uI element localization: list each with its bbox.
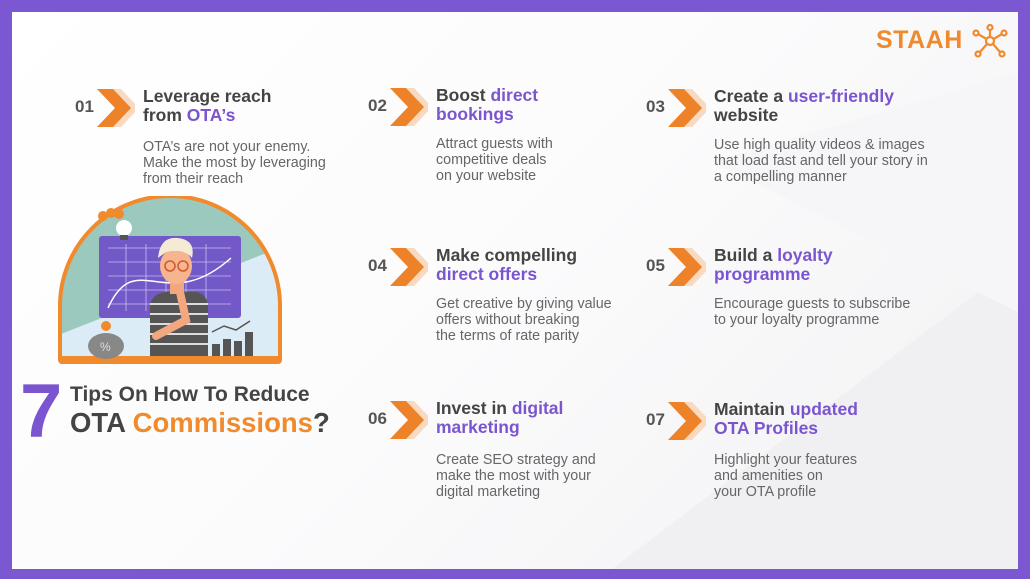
tip 06: Create SEO strategy and bbox=[436, 452, 596, 468]
tip 02: Attract guests with bbox=[436, 136, 553, 152]
tip 07: and amenities on bbox=[714, 468, 823, 484]
tip 07: your OTA profile bbox=[714, 484, 816, 500]
tip 05: to your loyalty programme bbox=[714, 312, 879, 328]
tip 07: OTA Profiles bbox=[714, 418, 818, 438]
headline: 7 Tips On How To Reduce OTA Commissions? bbox=[20, 369, 330, 454]
tip 01: Leverage reach bbox=[143, 86, 271, 106]
headline: 7 Tips On How To Reduce OTA Commissions?: 7 bbox=[20, 369, 62, 454]
headline: 7 Tips On How To Reduce OTA Commissions?: Tips On How To Reduce bbox=[70, 383, 310, 406]
tip 06: 06 bbox=[368, 409, 387, 428]
tip 02: 02 bbox=[368, 96, 387, 115]
tip 07 bbox=[646, 399, 858, 500]
tip 03: 03 bbox=[646, 97, 665, 116]
tip 03: a compelling manner bbox=[714, 169, 847, 185]
tip 06: marketing bbox=[436, 417, 520, 437]
tip 07: Highlight your features bbox=[714, 452, 857, 468]
tip 04: direct offers bbox=[436, 264, 537, 284]
tip 02: Boost direct bbox=[436, 85, 538, 105]
logo: STAAH: STAAH bbox=[876, 26, 963, 54]
tip 06: Invest in digital bbox=[436, 398, 563, 418]
tip 05: programme bbox=[714, 264, 810, 284]
tip 01: from OTA’s bbox=[143, 105, 235, 125]
tip 01: Make the most by leveraging bbox=[143, 155, 326, 171]
tip 06: make the most with your bbox=[436, 468, 591, 484]
tip 03: that load fast and tell your story in bbox=[714, 153, 928, 169]
tip 01: 01 bbox=[75, 97, 94, 116]
tip 04: offers without breaking bbox=[436, 312, 580, 328]
headline: 7 Tips On How To Reduce OTA Commissions?: OTA Commissions? bbox=[70, 407, 330, 438]
tip 02: competitive deals bbox=[436, 152, 546, 168]
tip 02: on your website bbox=[436, 168, 536, 184]
tip 05 bbox=[646, 245, 910, 328]
tip 04: the terms of rate parity bbox=[436, 328, 579, 344]
illustration: thinking man with chart: % bbox=[100, 340, 111, 354]
tip 05: Build a loyalty bbox=[714, 245, 833, 265]
tip 07: 07 bbox=[646, 410, 665, 429]
tip 01: OTA’s are not your enemy. bbox=[143, 139, 310, 155]
tip 04: Get creative by giving value bbox=[436, 296, 612, 312]
tip 04: Make compelling bbox=[436, 245, 577, 265]
tip 03: Use high quality videos & images bbox=[714, 137, 925, 153]
tip 02: bookings bbox=[436, 104, 514, 124]
tip 01: from their reach bbox=[143, 171, 243, 187]
tip 05: 05 bbox=[646, 256, 665, 275]
tip 05: Encourage guests to subscribe bbox=[714, 296, 910, 312]
tip 03 bbox=[646, 86, 928, 185]
tip 06: digital marketing bbox=[436, 484, 540, 500]
illustration: thinking man with chart bbox=[58, 196, 282, 364]
tip 01 bbox=[75, 86, 326, 187]
tip 04: 04 bbox=[368, 256, 387, 275]
tip 07: Maintain updated bbox=[714, 399, 858, 419]
tip 03: Create a user-friendly bbox=[714, 86, 894, 106]
tip 02 bbox=[368, 85, 553, 184]
logo: STAAH bbox=[876, 24, 1008, 58]
tip 03: website bbox=[714, 105, 778, 125]
tip 06 bbox=[368, 398, 596, 500]
tip 04 bbox=[368, 245, 612, 344]
